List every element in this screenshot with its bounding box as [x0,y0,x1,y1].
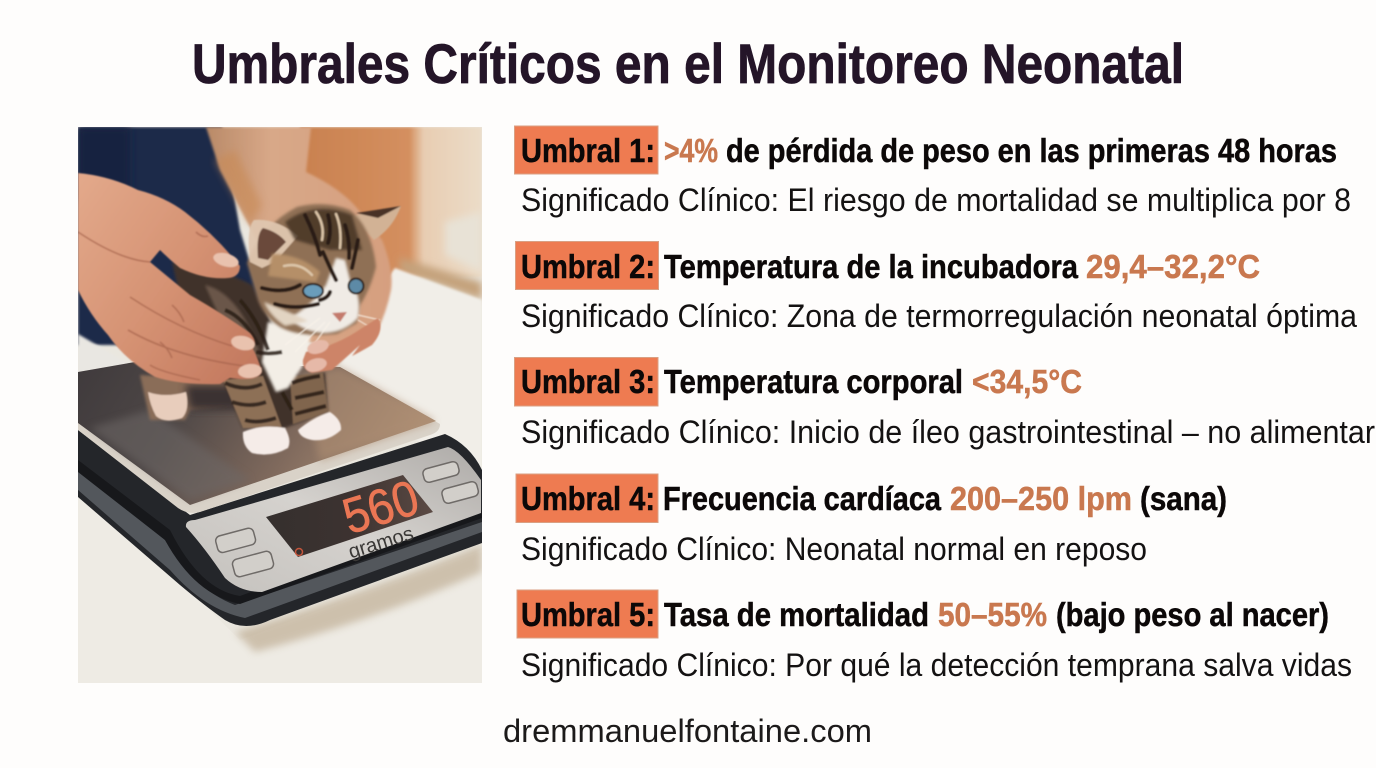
display reading: 560 [336,469,425,545]
threshold 3 heading: Temperatura corporal [664,363,963,400]
threshold 4 badge [516,474,658,522]
threshold 4 heading: Frecuencia cardíaca [663,480,942,517]
threshold 4 meaning: Significado Clínico: Neonatal normal en reposo [521,531,1147,567]
finger creases [78,232,262,380]
threshold 2 heading: Umbral 2: [521,248,655,285]
scale body [78,430,482,626]
left ear front [249,220,298,268]
threshold 5 heading: Tasa de mortalidad [664,596,929,633]
kitten paws [243,427,289,455]
threshold 4 heading: Umbral 4: [521,480,655,517]
handler arm and palm behind kitten [206,127,392,350]
threshold 4 heading: (sana) [1140,480,1227,517]
kitten [140,204,401,455]
kitten legs [223,376,282,428]
threshold 2 heading: Temperatura de la incubadora [664,248,1079,285]
display screen [266,475,433,557]
kitten body [172,262,328,428]
scale platform [78,362,440,513]
threshold 1 badge [514,126,658,174]
head stripes [262,215,358,307]
threshold 5 [517,590,1352,683]
white table left [78,333,101,347]
muzzle and cheeks [290,258,359,333]
threshold 1 heading: Umbral 1: [521,132,655,169]
threshold 3 heading: <34,5°C [972,363,1082,400]
kitten head [247,204,376,335]
threshold 3 [514,358,1375,450]
scale buttons [215,461,479,578]
threshold 5 heading: Umbral 5: [521,596,655,633]
threshold 1 [514,126,1351,218]
threshold 4 [516,474,1227,567]
chest fur [262,322,312,392]
right hand fingernails [306,340,329,355]
body stripes [225,300,326,422]
orange wall background [300,127,482,277]
blurred shelf [445,212,482,272]
fingernails [212,250,263,379]
back leg and haunch [140,375,240,420]
title: Umbrales Críticos en el Monitoreo Neonatal [192,32,1184,95]
threshold 5 heading: (bajo peso al nacer) [1056,596,1329,633]
eyes [303,284,323,298]
website footer: dremmanuelfontaine.com [503,713,872,749]
scale label: gramos [346,523,416,563]
threshold 4 heading [521,480,1227,517]
threshold 3 badge [514,358,658,406]
right ear [352,206,401,240]
right hand fingers under chin [303,318,380,374]
threshold 5 heading: 50–55% [938,596,1047,633]
threshold 2 badge [516,242,658,290]
nose [332,312,347,322]
lower table surface [78,480,482,683]
threshold 3 heading: Umbral 3: [521,363,655,400]
threshold 2 [516,242,1357,334]
white table right [344,266,482,466]
silver control panel [186,447,481,592]
whiskers [298,314,380,342]
threshold 5 badge [517,590,658,638]
threshold 2 heading [521,248,1260,285]
threshold 5 heading [521,596,1329,633]
dark crown [285,209,362,250]
threshold 3 heading [521,363,1082,400]
left hand [78,173,263,384]
threshold 2 heading: 29,4–32,2°C [1086,248,1260,285]
photo: kitten on digital scale [78,127,482,683]
threshold 1 meaning: Significado Clínico: El riesgo de mortalidad se multiplica por 8 [521,182,1351,218]
shirt of the handler [78,127,275,345]
threshold 1 heading: >4% [664,132,718,169]
threshold 4 heading: 200–250 lpm [950,480,1132,517]
